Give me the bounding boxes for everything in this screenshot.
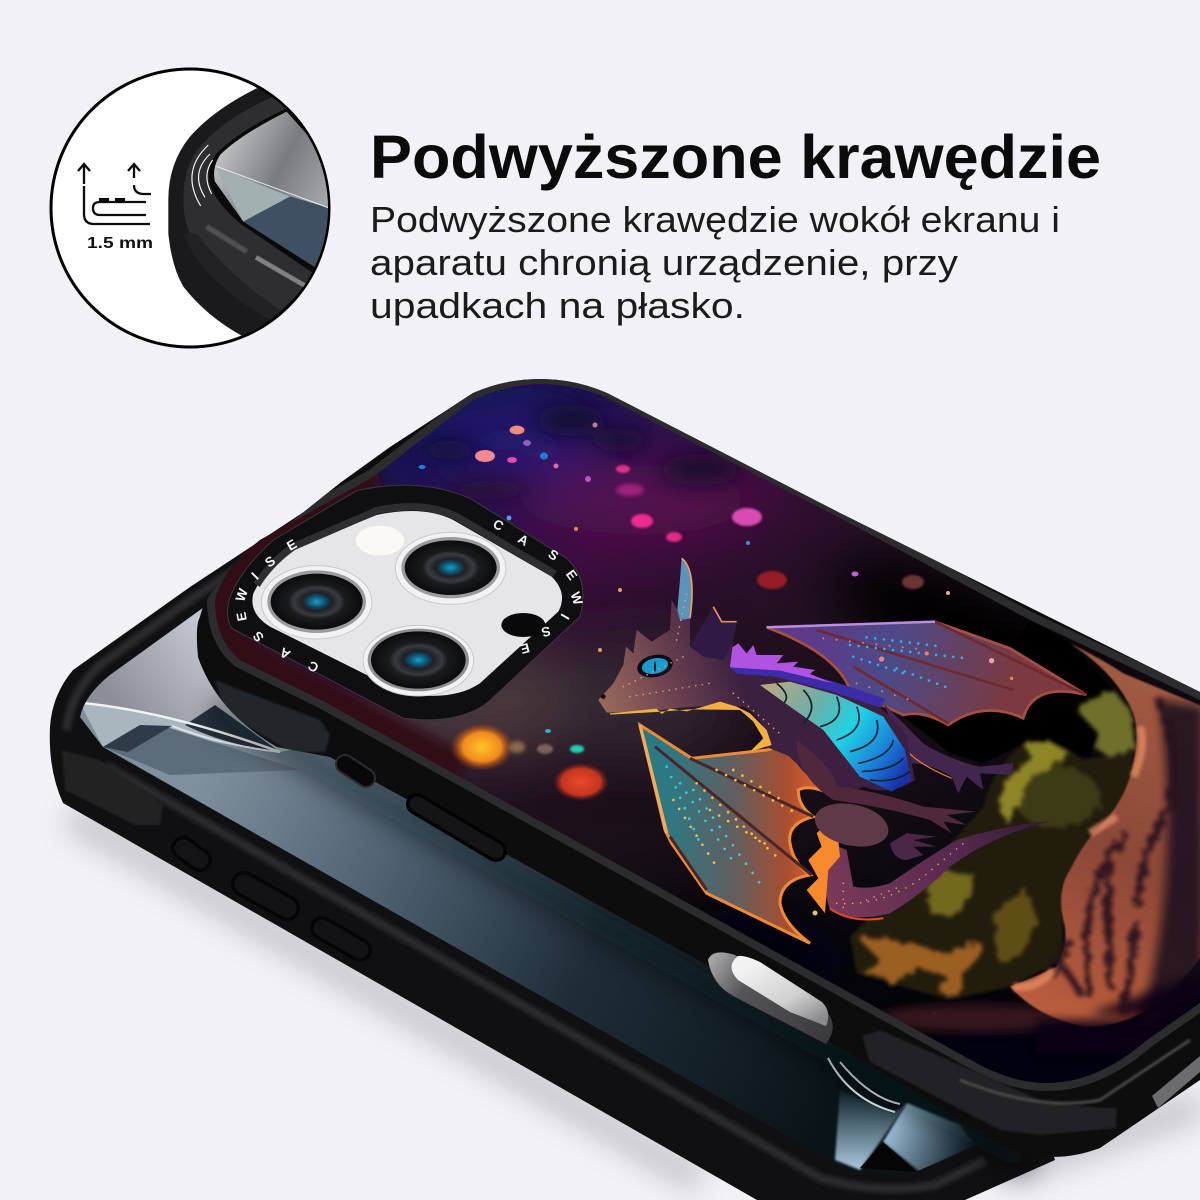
back wing [767, 622, 1087, 725]
camera plate [252, 511, 562, 696]
lidar sensor [501, 613, 545, 637]
heading: Podwyższone krawędzie [370, 123, 1101, 191]
nose [601, 694, 606, 699]
CASEWISE ring text: C [305, 658, 321, 676]
upper phone [197, 370, 1200, 1165]
body [737, 674, 915, 790]
tree shading [1137, 700, 1200, 1033]
lower phone case [50, 465, 1055, 1200]
lower phone soft shadow [70, 815, 1200, 1180]
camera island [227, 485, 586, 720]
description text [370, 199, 1060, 326]
lower phone [50, 465, 1200, 1200]
tail [825, 821, 1052, 918]
CASEWISE ring text: I [248, 569, 262, 583]
tail underglow [830, 908, 883, 920]
inset circle: raised edge detail [51, 60, 340, 360]
rock mass [850, 742, 1133, 1000]
haze at base [877, 1004, 1077, 1032]
CASEWISE ring text: W [232, 586, 251, 603]
flash [356, 526, 404, 556]
rear claw [890, 833, 937, 860]
CASEWISE ring text: A [277, 644, 293, 662]
CASEWISE ring text: E [563, 567, 580, 583]
head and neck [598, 558, 797, 757]
tail sparkles [837, 843, 963, 913]
lower phone corner pad [62, 750, 163, 825]
rock and tree scene [850, 620, 1200, 1053]
CASEWISE ring text: E [284, 536, 299, 554]
thigh [811, 797, 892, 853]
neck spikes [728, 643, 833, 683]
CASEWISE ring text: E [233, 611, 250, 622]
tree highlights [1013, 727, 1142, 987]
bokeh lights [418, 422, 950, 1016]
description text: upadkach na płasko. [370, 285, 745, 326]
art strip around camera [224, 470, 460, 772]
moss clumps [857, 690, 1137, 993]
belly scales [760, 682, 912, 792]
case corner close-up [168, 88, 328, 336]
dragon artwork [598, 558, 1087, 943]
jaw and chest fringe [610, 702, 772, 752]
phone artwork [200, 370, 1200, 1100]
black cave opening [903, 620, 1113, 763]
CASEWISE ring text: E [519, 640, 531, 657]
CASEWISE ring text: W [568, 590, 586, 607]
icon: raised edge diagram [78, 164, 151, 224]
side button long [417, 804, 496, 851]
lens: left [261, 566, 372, 639]
front wing [640, 725, 837, 943]
CASEWISE ring text [232, 516, 586, 676]
CASEWISE ring text: S [540, 623, 552, 640]
upper case rim sheen [215, 384, 1200, 1135]
art nebula glow [360, 406, 1200, 1090]
lower phone case highlight [66, 500, 985, 1189]
front leg [797, 740, 977, 833]
back leg [883, 703, 1013, 793]
CASEWISE ring text: C [490, 516, 507, 534]
lower phone screen [80, 608, 974, 1172]
island ring [227, 485, 583, 720]
label: 1.5 mm: 1.5 mm [87, 235, 153, 252]
plate inner lip [257, 507, 555, 585]
charging port [708, 952, 833, 1044]
head sparkles [623, 593, 783, 737]
lens: right [395, 532, 506, 604]
upper phone case [197, 379, 1200, 1157]
tree grooves [1050, 697, 1173, 1013]
description text: Podwyższone krawędzie wokół ekranu i [370, 199, 1060, 240]
art background [200, 370, 1200, 1100]
side button small [345, 764, 366, 778]
buttons on lower phone [183, 848, 360, 950]
orange rim on back leg [910, 752, 952, 779]
nebula dark wisps [422, 404, 740, 500]
tail spikes [807, 827, 840, 913]
upper phone shadow [215, 705, 1030, 1165]
CASEWISE ring text: A [515, 531, 532, 549]
description text: aparatu chronią urządzenie, przy [370, 242, 958, 283]
CASEWISE ring text: S [250, 628, 267, 645]
lens: bottom [363, 625, 474, 696]
tree trunk [1010, 643, 1200, 1027]
tree base shadow [1037, 973, 1200, 1053]
CASEWISE ring text: S [262, 553, 278, 570]
CASEWISE ring text: S [545, 546, 561, 564]
neck blue sheen [730, 668, 883, 703]
dragon eye [637, 654, 673, 678]
CASEWISE ring text: I [558, 611, 572, 622]
